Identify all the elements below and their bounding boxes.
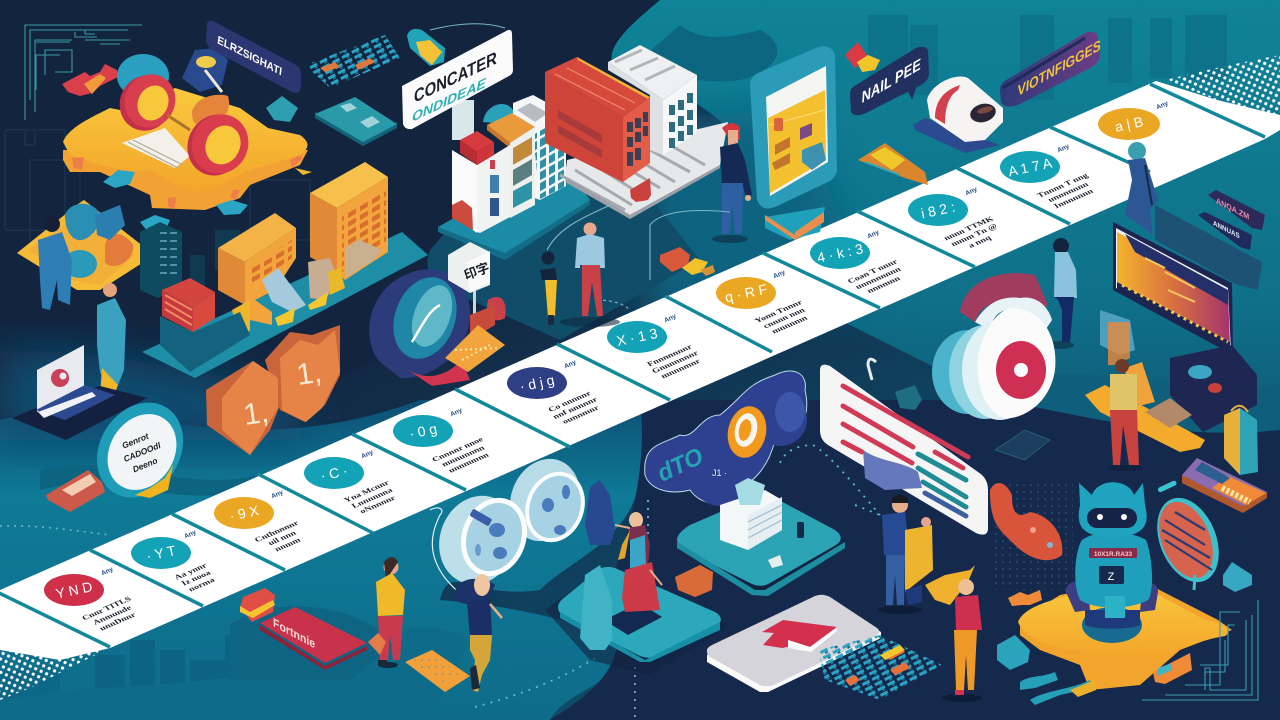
building: red striped block bbox=[160, 278, 250, 372]
concept sign: CONCATER bbox=[414, 47, 497, 107]
icon: cloud with orange gear bbox=[645, 371, 807, 506]
step 6 card: Co nnnnnr bbox=[546, 389, 593, 413]
step 12 card: Any bbox=[1155, 100, 1170, 111]
dotted path: left bbox=[0, 526, 110, 535]
step 7 card bbox=[607, 313, 706, 381]
step 3 card: Cnthnnnnr bbox=[252, 519, 300, 544]
step 2 card: · Y T bbox=[145, 542, 178, 564]
step 1 card: unnDnnr bbox=[97, 610, 138, 632]
step 4 card: · C · bbox=[319, 462, 349, 484]
figure: man in shirt by headset bbox=[1046, 238, 1077, 349]
halftone: top right ribbon end bbox=[1165, 55, 1280, 116]
sign: purple gradient bbox=[1000, 32, 1102, 107]
sign: purple gradient: VIOTNFIGGES bbox=[1017, 36, 1102, 99]
callout: teal speech bubble: CADOOdl bbox=[122, 440, 163, 464]
step 9 card: unnnnnnnn bbox=[853, 265, 903, 291]
red slab with label bbox=[260, 607, 386, 670]
rainbow item bbox=[858, 143, 928, 185]
step 6 card: · d j g bbox=[518, 372, 556, 394]
concept sign bbox=[402, 29, 513, 140]
step 9 card: Any bbox=[866, 229, 881, 240]
step 11 card bbox=[1000, 143, 1101, 212]
stacked small blocks bbox=[240, 588, 275, 622]
label sign: navy: ELRZSIGHATI bbox=[217, 34, 283, 79]
step 11 card: Tnnnn T nng bbox=[1035, 171, 1090, 199]
step 9 card: 4 · k : 3 bbox=[816, 240, 865, 266]
figure: teal robot bbox=[1065, 482, 1158, 643]
step 10 card: a nnq bbox=[966, 233, 993, 249]
step 11 card: Any bbox=[1056, 143, 1071, 154]
step 6 card bbox=[507, 359, 605, 427]
step 2 card: norma bbox=[186, 575, 217, 593]
step 1 card: Y N D bbox=[54, 578, 94, 602]
icon: tablet device bbox=[750, 46, 837, 208]
callout: teal speech bubble: Deeno bbox=[131, 455, 159, 474]
signs: small dark tags: ANNUAS bbox=[1213, 220, 1240, 241]
step 3 card: nnmm bbox=[272, 536, 302, 553]
cable loop bbox=[430, 508, 475, 598]
panel: yellow honeycomb platform with red rings bbox=[63, 54, 312, 210]
block cluster: pale shapes bbox=[232, 258, 345, 340]
icon: cloud with orange gear: dTO bbox=[653, 443, 708, 487]
figure: teal robot: 10X1R.RA33 bbox=[1094, 551, 1133, 558]
icon: red ring right bbox=[178, 105, 258, 185]
step 9 card: nnnmnn bbox=[865, 274, 902, 295]
small sign on post: 印字 bbox=[462, 260, 491, 283]
dashboard panel behind monitor bbox=[1155, 205, 1262, 290]
step 5 card bbox=[393, 407, 496, 477]
platform: woman in red skirt bbox=[545, 480, 730, 675]
step 1 card bbox=[44, 566, 144, 635]
teal pills under platform bbox=[103, 170, 248, 232]
step 7 card: Fnnnnnnnr bbox=[645, 342, 694, 368]
icon: orange heart badges: 1, bbox=[294, 356, 324, 392]
step 8 card: Any bbox=[772, 269, 787, 280]
teal ledge under orange buildings bbox=[142, 232, 428, 378]
skyline: faint top right city bbox=[868, 15, 1227, 100]
step 3 card: · 9 X bbox=[228, 502, 261, 524]
concept sign: ONDIDEAE bbox=[412, 75, 486, 125]
step 2 card: Any bbox=[183, 529, 198, 540]
step 4 card: Any bbox=[360, 449, 375, 460]
dot grid by coral bbox=[993, 480, 1073, 590]
step 10 card bbox=[908, 186, 1007, 255]
figure: person with laptop bbox=[97, 283, 126, 400]
step 2 card: Iz nooa bbox=[179, 568, 213, 587]
white back wing bbox=[513, 95, 566, 200]
icon: orange heart badges bbox=[206, 325, 340, 455]
panel: document stack on teal tray bbox=[677, 478, 845, 596]
skyline: faint dark top left city bbox=[5, 130, 310, 240]
step 7 card: Gnnnnnnnr bbox=[650, 349, 700, 375]
central orange-topped block bbox=[487, 113, 535, 143]
panel: chat window bbox=[820, 359, 988, 535]
icon: mirror oval bbox=[1146, 489, 1252, 592]
step 6 card: ounnmnr bbox=[560, 403, 601, 425]
icon: glass lens pair bbox=[427, 449, 595, 595]
icon: calculator bbox=[1157, 458, 1267, 513]
step 3 card: uil nnn bbox=[266, 529, 298, 547]
step 12 card bbox=[1098, 100, 1170, 140]
circuit lines bottom right bbox=[1142, 600, 1258, 700]
step 5 card: Any bbox=[449, 407, 464, 418]
step 6 card: nnf nnnnnr bbox=[551, 395, 599, 420]
step 2 card bbox=[131, 529, 220, 594]
icon: monitor bbox=[1113, 222, 1233, 355]
building: grey white block bbox=[608, 45, 697, 155]
step 5 card: mnnunnnn bbox=[439, 443, 486, 468]
building: low orange bbox=[218, 213, 296, 305]
label sign: navy bbox=[206, 21, 301, 93]
step 2 card: Aa ynnr bbox=[172, 561, 209, 581]
group: team on yellow card bbox=[17, 200, 150, 310]
figure: person in orange trousers bbox=[925, 565, 982, 702]
step 10 card: Any bbox=[964, 186, 979, 197]
sign: nail pee: NAIL PEE bbox=[861, 55, 923, 107]
icon: orange heart badges: 1, bbox=[241, 396, 271, 432]
icon: teal helmet bbox=[117, 54, 169, 98]
step 3 card bbox=[214, 489, 311, 557]
figure: woman in red skirt body bbox=[615, 512, 662, 612]
small orange parts bbox=[1008, 590, 1042, 606]
step 6 card: Any bbox=[563, 359, 578, 370]
figure: running person bbox=[455, 574, 502, 692]
figure: woman in yellow sweater bbox=[376, 557, 405, 668]
figure: blue person on ribbon bbox=[1125, 142, 1158, 235]
figure: man in light shirt bbox=[560, 222, 620, 327]
small sign on post bbox=[448, 242, 506, 323]
orange keypad bbox=[405, 650, 470, 692]
icon: orange cap bbox=[192, 95, 229, 126]
figure: woman in yellow pants bbox=[540, 252, 557, 325]
signs: small dark tags: ANQA.ZM bbox=[1216, 196, 1249, 222]
icon: padlock disc with arch bbox=[932, 273, 1055, 420]
step 8 card: q · R F bbox=[723, 281, 769, 305]
icon: orange coral bbox=[990, 483, 1062, 560]
icon: phone with red arrow bbox=[707, 595, 881, 692]
step 9 card bbox=[810, 229, 910, 298]
figure: teal robot: Z bbox=[1108, 571, 1115, 583]
step 4 card: oNnnnnr bbox=[358, 494, 397, 515]
step 7 card: Any bbox=[663, 313, 678, 324]
step 10 card: mmm Tn @ bbox=[949, 222, 999, 248]
icon: white camera unit bbox=[913, 77, 1003, 153]
building: red block bbox=[545, 57, 651, 202]
sign: nail pee bbox=[850, 47, 929, 115]
red yellow toy bbox=[845, 42, 880, 72]
ribbon separators bbox=[0, 84, 1265, 647]
data mosaic: bottom bbox=[818, 635, 942, 700]
step 4 card: Lnnnnnna bbox=[349, 486, 395, 510]
panel: yellow honeycomb base with robot bbox=[1018, 482, 1232, 690]
building: tall orange bbox=[310, 162, 388, 280]
icon: big navy lens bbox=[369, 268, 470, 386]
step 5 card: Cnnnnr nnoe bbox=[430, 435, 485, 463]
icon: teal lump behind panel bbox=[895, 385, 922, 410]
dark teal tower bbox=[140, 222, 240, 300]
orange blob near platform bbox=[675, 565, 713, 597]
step 10 card: nnnn TTMK bbox=[941, 214, 996, 242]
step 1 card: Cnnr TITLS bbox=[80, 594, 133, 622]
callout: teal speech bubble: Genrot bbox=[120, 430, 151, 451]
step 8 card: cnnnn nnn bbox=[761, 306, 807, 330]
red slab with label: Fortnnie bbox=[273, 615, 315, 652]
step 7 card: mnnnmnr bbox=[659, 357, 702, 380]
step 10 card: i 8 2 : bbox=[920, 199, 956, 221]
small stacked blocks bbox=[660, 247, 715, 276]
data mosaic: top bbox=[305, 35, 400, 88]
dotted arcs: center bbox=[430, 24, 730, 310]
icon: small data card bbox=[995, 430, 1050, 460]
left white tower bbox=[452, 150, 477, 233]
figure: blue person at sign bbox=[182, 48, 228, 92]
icon: cloud with orange gear: J1 · bbox=[712, 468, 727, 478]
teal book bbox=[315, 97, 397, 146]
poster cards bbox=[1100, 310, 1135, 355]
step 1 card: Any bbox=[100, 566, 115, 577]
skyline: bottom left city bbox=[0, 606, 470, 720]
orange teal box by tablet bbox=[765, 207, 825, 240]
step 8 card: Yonn Tnnnr bbox=[753, 298, 804, 324]
step 11 card: unnnnnnn bbox=[1046, 180, 1090, 204]
step 1 card: Anmunde bbox=[91, 603, 133, 626]
step 8 card bbox=[716, 269, 815, 338]
icon: red bow bbox=[62, 64, 118, 96]
building: white apartment block on teal base bbox=[438, 95, 590, 260]
callout: teal speech bubble bbox=[80, 386, 200, 514]
icon: circuit lines top left bbox=[25, 25, 142, 120]
figure: woman with bag bbox=[1107, 359, 1155, 471]
small teal parts under robot base bbox=[997, 635, 1192, 705]
step 3 card: Any bbox=[270, 489, 285, 500]
icon: red ring left bbox=[111, 66, 184, 139]
panel: desk with woman bbox=[1085, 310, 1257, 471]
figure: person in blue with folder bbox=[878, 495, 933, 614]
teal small tray bbox=[266, 96, 298, 122]
halftone: lower left fade bbox=[0, 650, 105, 700]
figure: blue person behind bbox=[585, 480, 615, 545]
step 12 card: a | B bbox=[1113, 113, 1145, 135]
step 5 card: unnmmnn bbox=[446, 451, 491, 474]
striped plaza bbox=[560, 122, 728, 219]
figure: man with red cap bbox=[712, 123, 752, 243]
icon: laptop bbox=[12, 345, 147, 440]
step 8 card: mnnnmn bbox=[770, 314, 809, 335]
step 4 card: Yna Mcnnr bbox=[342, 478, 391, 504]
step 7 card: X · 1 3 bbox=[615, 325, 659, 349]
icon: yellow bag bbox=[1224, 406, 1258, 475]
signs: small dark tags bbox=[1198, 190, 1265, 250]
step 9 card: Coan T nnnr bbox=[845, 257, 899, 285]
dotted paths: lower center bbox=[475, 445, 880, 720]
icon: red device bbox=[46, 470, 105, 512]
step 4 card bbox=[304, 449, 402, 517]
keyboard orange bbox=[445, 305, 505, 372]
step 5 card: · 0 g bbox=[408, 420, 438, 442]
step 11 card: Innnnnnn bbox=[1052, 187, 1095, 210]
step 11 card: A 1 7 A bbox=[1007, 154, 1054, 179]
